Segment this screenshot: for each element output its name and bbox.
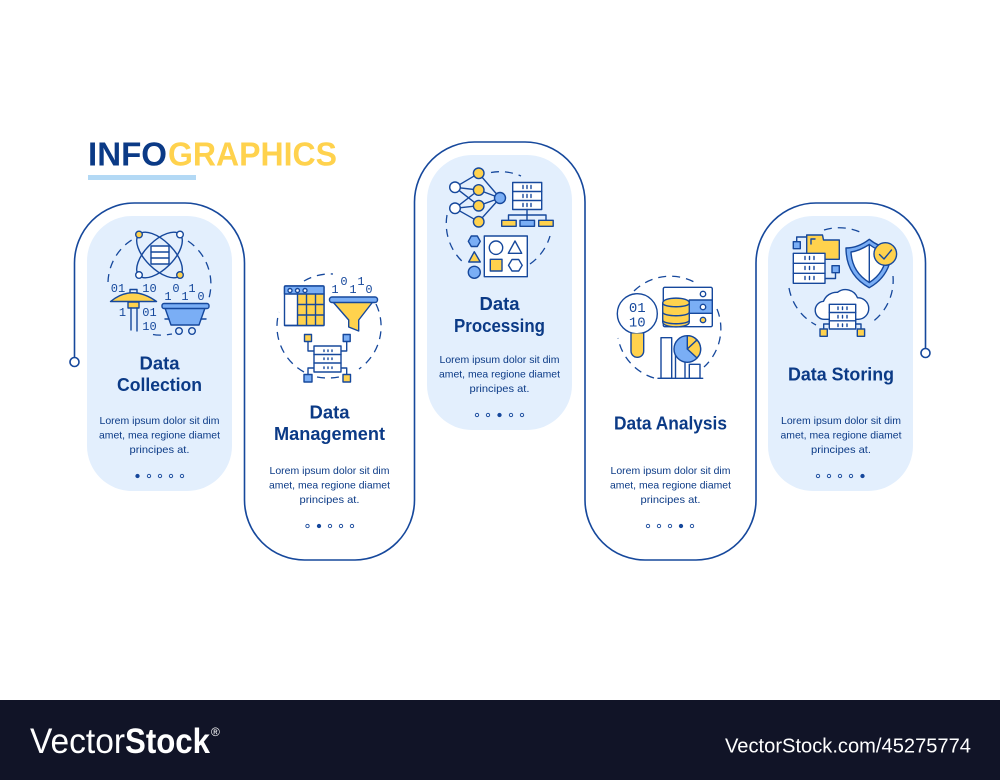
text block: data management: principes at. [300, 494, 360, 506]
text block: data processing: amet, mea regione diamet [439, 368, 560, 380]
icon: data storing [789, 228, 897, 336]
heading: data processing [454, 294, 545, 336]
text block: data analysis: Lorem ipsum dolor sit dim [610, 465, 731, 477]
heading: data collection: Data [140, 354, 181, 374]
serpentine outline connecting all steps [70, 142, 930, 560]
footer image id: VectorStock.com/45275774 [725, 734, 971, 758]
heading: data storing: Data Storing [788, 364, 894, 384]
heading: data processing: Data [480, 294, 521, 314]
icon: data collection: 1 [181, 290, 189, 304]
icon: data collection: 1 [188, 282, 196, 296]
icon: data analysis [617, 276, 721, 378]
footer logo: Stock [125, 722, 210, 761]
text block: data storing [780, 415, 902, 456]
text block: data management [269, 465, 390, 506]
footer band [0, 700, 1000, 780]
title: INFO [88, 136, 167, 172]
icon: data collection: 01 [111, 282, 125, 296]
heading: data management: Management [274, 424, 385, 444]
text block: data processing: principes at. [470, 383, 530, 395]
text block: data collection: principes at. [130, 444, 190, 456]
heading: data processing: Processing [454, 316, 545, 336]
icon: data management: 1 [331, 283, 339, 297]
pagination dots 1 [136, 474, 184, 478]
icon: data collection: 0 [197, 290, 205, 304]
icon: data analysis: 01 [629, 301, 646, 317]
text block: data analysis: principes at. [640, 494, 700, 506]
pagination dots 3 [475, 413, 524, 417]
text block: data management: amet, mea regione diamet [269, 480, 390, 492]
heading: data management [274, 402, 385, 444]
heading: data management: Data [310, 402, 351, 422]
heading: data collection: Collection [117, 375, 202, 395]
text block: data storing: principes at. [811, 444, 871, 456]
icon: data management: 1 [357, 275, 365, 289]
icon: data collection [108, 225, 211, 335]
text block: data processing [439, 354, 560, 395]
footer logo: ® [211, 725, 220, 739]
icon: data management: 0 [365, 283, 373, 297]
text block: data storing: Lorem ipsum dolor sit dim [781, 415, 901, 427]
footer logo [30, 722, 220, 761]
icon: data management [277, 274, 381, 382]
title [88, 136, 337, 180]
footer logo: Vector [30, 722, 125, 761]
text block: data storing: amet, mea regione diamet [780, 430, 902, 442]
text block: data analysis: amet, mea regione diamet [610, 480, 731, 492]
heading: data analysis: Data Analysis [614, 414, 727, 434]
icon: data collection: 10 [142, 282, 157, 296]
icon: data management: 0 [340, 275, 348, 289]
heading: data collection [117, 354, 202, 395]
icon: data collection: 1 [164, 290, 172, 304]
icon: data collection: 1 [119, 306, 126, 320]
panel: light backgrounds [87, 155, 913, 491]
text block: data collection: Lorem ipsum dolor sit dim [100, 415, 220, 427]
text block: data collection: amet, mea regione diamet [99, 430, 220, 442]
text block: data analysis [610, 465, 731, 506]
icon: data collection: 0 [172, 282, 180, 296]
text block: data management: Lorem ipsum dolor sit dim [270, 465, 390, 477]
title: GRAPHICS [168, 136, 337, 172]
icon: data management: 1 [349, 283, 357, 297]
icon: data analysis: 10 [629, 316, 646, 332]
icon: data processing [446, 168, 553, 278]
icon: data collection: 01 [142, 306, 157, 320]
pagination dots 2 [306, 524, 354, 528]
text block: data processing: Lorem ipsum dolor sit dim [440, 354, 560, 366]
text block: data collection [99, 415, 220, 456]
pagination dots 5 [816, 474, 864, 478]
icon: data collection: 10 [142, 320, 157, 334]
pagination dots 4 [646, 524, 694, 528]
